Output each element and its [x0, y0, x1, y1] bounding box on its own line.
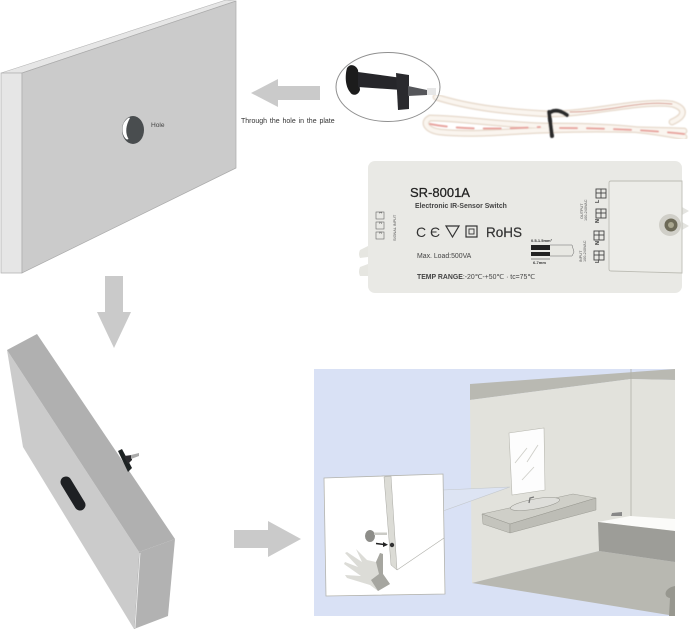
wire strip diagram: 6-7mm: [533, 260, 546, 265]
output terminals: [594, 189, 606, 260]
controller module SR-8001A: [359, 161, 689, 293]
inset: sensor detail: [324, 474, 445, 596]
wire strip diagram: 0.5-1.5mm²: [531, 238, 553, 243]
sensor body: [346, 65, 436, 110]
mounted plate, rear view: [7, 334, 175, 629]
terminal numbers: 2: [378, 221, 383, 224]
arrow: left toward plate: [251, 79, 320, 107]
certification marks: C: [416, 224, 426, 240]
certification marks: Є: [430, 224, 440, 240]
hole with sensor head: [66, 482, 80, 505]
terminal letters: L: [595, 259, 601, 263]
bathtub: [598, 512, 675, 562]
mirror: [509, 428, 545, 495]
output/input small labels: INPUT: [579, 250, 583, 262]
protruding sensor: [118, 449, 139, 472]
wall band: [470, 369, 675, 400]
sensor in oval callout: [336, 52, 440, 122]
screw: [659, 214, 681, 236]
output/input small labels: [579, 199, 588, 262]
arrow: down: [97, 276, 131, 348]
cable tie: [549, 111, 567, 136]
inset sensor knob: [365, 530, 387, 542]
hole label: Hole: [151, 122, 165, 129]
arrow: right to scene: [234, 521, 301, 557]
callout beam: [443, 487, 510, 511]
output/input small labels: 100-240VAC: [583, 240, 587, 262]
terminal letters: N: [595, 219, 601, 223]
signal input label: SIGNAL INPUT: [393, 214, 397, 241]
terminal letters: L: [595, 199, 601, 203]
temp range: TEMP RANGE:-20℃-+50℃ · tc=75℃: [417, 274, 535, 281]
sink counter: [482, 494, 596, 533]
wire strip diagram: [531, 238, 574, 265]
certification marks: [416, 224, 522, 240]
inset arrow: [376, 542, 388, 547]
subtitle: Electronic IR-Sensor Switch: [415, 203, 507, 210]
stool: [666, 586, 675, 616]
max load: Max. Load:500VA: [417, 253, 472, 260]
hole: [122, 116, 144, 144]
panel: bathroom installation scene: [314, 369, 675, 616]
certification marks: RoHS: [486, 225, 522, 240]
inset dot: [390, 543, 394, 547]
top plate with hole: [1, 0, 236, 273]
terminal letters: N: [595, 241, 601, 245]
floor: [472, 551, 675, 616]
ribbon wire bundle: [426, 97, 684, 137]
output/input small labels: OUTPUT: [580, 203, 584, 219]
back wall: [470, 379, 675, 583]
terminal numbers: 3: [378, 231, 383, 234]
terminal numbers: 1: [378, 211, 383, 214]
hand: [344, 549, 390, 591]
cover plate: [609, 181, 682, 273]
signal input terminals: [376, 212, 384, 239]
terminal numbers: [378, 211, 383, 234]
caption: through the hole: Through the hole in the plate: [241, 118, 335, 125]
output/input small labels: 100-240VAC: [584, 199, 588, 221]
terminal letters: [595, 199, 601, 263]
model name: SR-8001A: [410, 185, 470, 200]
